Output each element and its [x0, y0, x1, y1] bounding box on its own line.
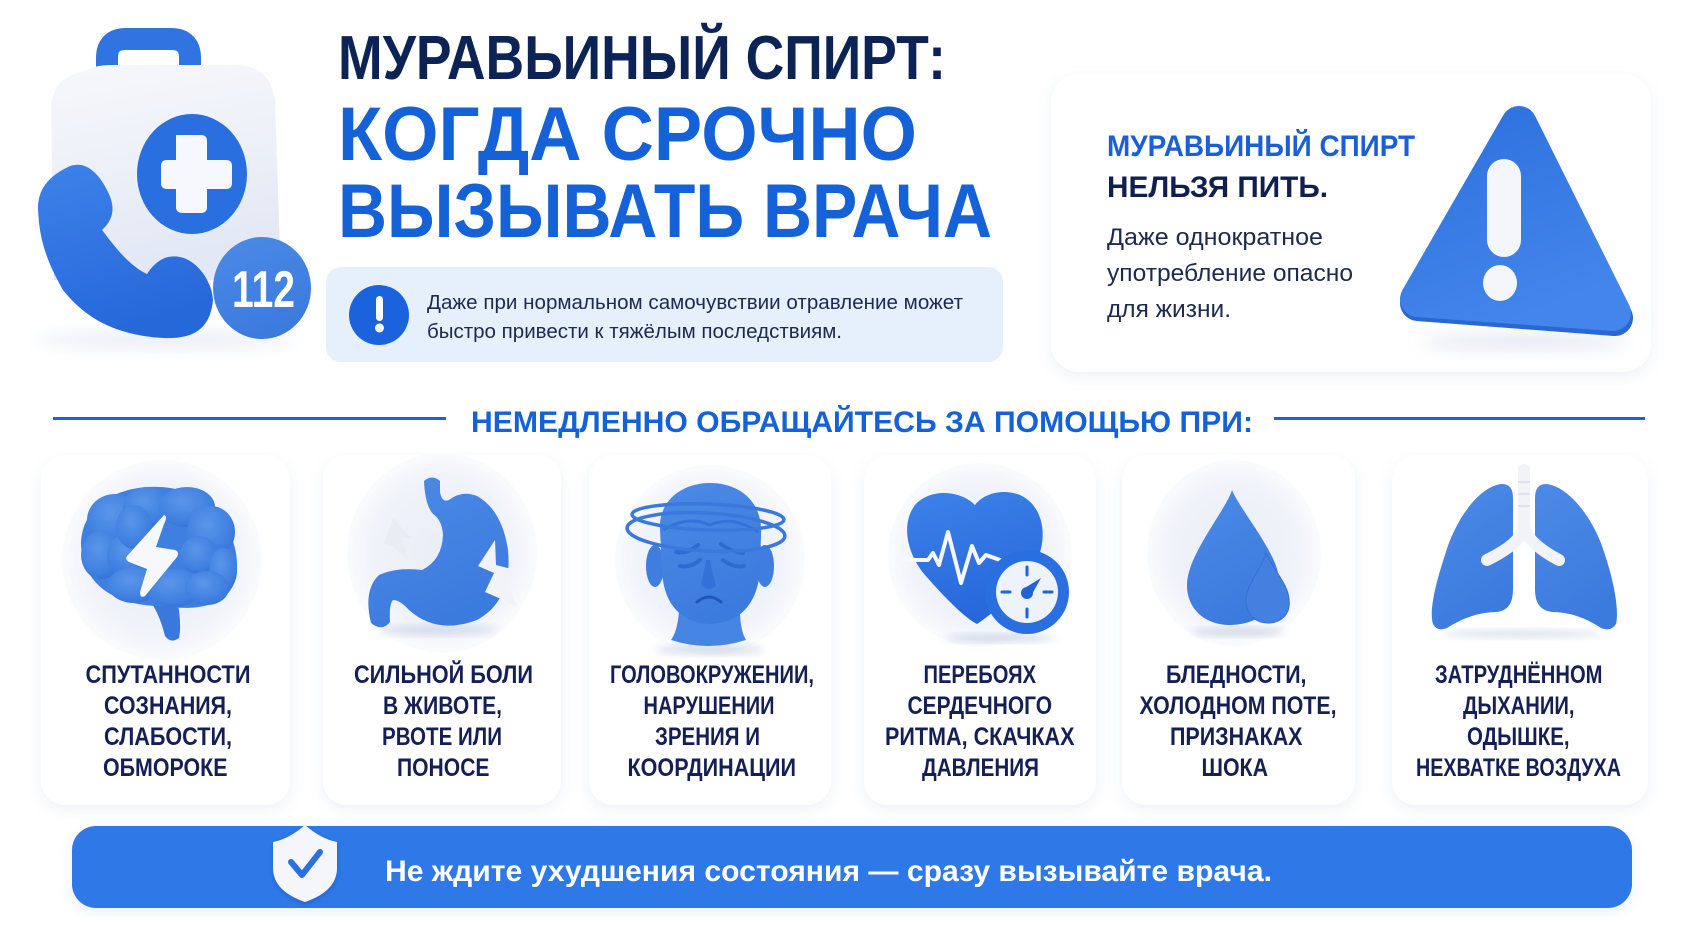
text: heart rhythm — [885, 661, 1075, 782]
text: difficulty breathing — [1416, 661, 1621, 782]
panel: abdominal pain — [323, 453, 561, 805]
panel: difficulty breathing — [1392, 455, 1648, 805]
text: pallor and cold sweat: ПРИЗНАКАХ — [1170, 723, 1303, 751]
text: dizziness: ЗРЕНИЯ И — [655, 723, 760, 751]
text: danger description — [1107, 224, 1353, 323]
icon: 112 badge: 112 — [232, 261, 295, 319]
panel: dizziness — [589, 455, 831, 805]
text: dizziness: НАРУШЕНИИ — [644, 692, 774, 720]
text: banner message: Не ждите ухудшения состояния — сразу вызывайте врача. — [385, 855, 1272, 888]
text: dizziness: КООРДИНАЦИИ — [628, 754, 796, 782]
section heading — [53, 405, 1645, 439]
text: abdominal pain: СИЛЬНОЙ БОЛИ — [354, 659, 533, 689]
text: warning note — [427, 291, 964, 343]
text: danger description: употребление опасно — [1107, 260, 1353, 287]
text: warning note: Даже при нормальном самочувствии отравление может — [427, 291, 964, 314]
text: difficulty breathing: ОДЫШКЕ, — [1467, 723, 1570, 751]
text: abdominal pain: ПОНОСЕ — [397, 754, 490, 782]
text: warning note: быстро привести к тяжёлым последствиям. — [427, 320, 842, 343]
illustration: first aid kit, phone and 112 badge — [35, 39, 311, 347]
icon: kit handle — [107, 39, 190, 72]
callout: warning note — [326, 267, 1003, 362]
icon: heart and pressure gauge — [888, 463, 1072, 647]
icon: 112 badge — [213, 237, 311, 339]
icon: dizzy head — [615, 465, 805, 655]
heading: do not drink: МУРАВЬИНЫЙ СПИРТ — [1107, 129, 1415, 163]
text: difficulty breathing: ДЫХАНИИ, — [1463, 692, 1574, 720]
text: pallor and cold sweat: ХОЛОДНОМ ПОТЕ, — [1140, 692, 1336, 720]
text: confusion: СПУТАННОСТИ — [86, 661, 250, 689]
icon: spinning rings — [626, 501, 786, 555]
panel: pallor and cold sweat — [1122, 455, 1355, 805]
icon: lungs — [1432, 470, 1617, 638]
icon: lightning bolt — [126, 515, 178, 597]
text: abdominal pain: В ЖИВОТЕ, — [383, 692, 502, 720]
panel: confusion — [41, 455, 290, 805]
icon: warning triangle — [1418, 124, 1630, 348]
title: ВЫЗЫВАТЬ ВРАЧА — [338, 169, 992, 254]
heading: do not drink: НЕЛЬЗЯ ПИТЬ. — [1107, 171, 1328, 204]
icon: gauge — [985, 550, 1069, 634]
text: difficulty breathing: НЕХВАТКЕ ВОЗДУХА — [1416, 754, 1621, 782]
text: dizziness — [610, 661, 814, 782]
text: pallor and cold sweat: ШОКА — [1202, 754, 1268, 782]
text: abdominal pain: РВОТЕ ИЛИ — [382, 723, 502, 751]
panel: heart rhythm — [864, 455, 1096, 805]
text: danger description: Даже однократное — [1107, 224, 1323, 251]
text: danger description: для жизни. — [1107, 296, 1231, 323]
text: confusion — [86, 661, 250, 782]
banner: call a doctor — [72, 825, 1632, 908]
text: heart rhythm: СЕРДЕЧНОГО — [908, 692, 1052, 720]
icon: exclamation circle — [349, 285, 409, 345]
text: abdominal pain — [354, 659, 533, 782]
icon: trachea and bronchi — [1487, 470, 1559, 560]
text: confusion: СЛАБОСТИ, — [104, 723, 232, 751]
title: КОГДА СРОЧНО — [338, 92, 917, 177]
text: pallor and cold sweat — [1140, 661, 1336, 782]
text: confusion: СОЗНАНИЯ, — [104, 692, 232, 720]
icon: sweat drops — [1147, 460, 1321, 646]
heading: do not drink — [1107, 129, 1415, 204]
title — [338, 23, 992, 254]
text: heart rhythm: ПЕРЕБОЯХ — [924, 661, 1036, 689]
text: pallor and cold sweat: БЛЕДНОСТИ, — [1166, 661, 1306, 689]
icon: stomach — [347, 453, 537, 653]
text: heart rhythm: ДАВЛЕНИЯ — [922, 754, 1039, 782]
text: heart rhythm: РИТМА, СКАЧКАХ — [885, 723, 1075, 751]
icon: brain — [62, 460, 262, 660]
icon: kit body — [51, 65, 281, 280]
icon: pain bolts — [384, 518, 517, 606]
text: difficulty breathing: ЗАТРУДНЁННОМ — [1435, 661, 1602, 689]
icon: telephone handset — [38, 165, 213, 338]
text: confusion: ОБМОРОКЕ — [103, 754, 228, 782]
section heading: НЕМЕДЛЕННО ОБРАЩАЙТЕСЬ ЗА ПОМОЩЬЮ ПРИ: — [471, 405, 1253, 439]
panel: do not drink — [1051, 74, 1651, 372]
icon: ECG line — [903, 532, 1000, 583]
text: dizziness: ГОЛОВОКРУЖЕНИИ, — [610, 661, 814, 689]
icon: plus badge — [137, 114, 247, 234]
title: МУРАВЬИНЫЙ СПИРТ: — [338, 23, 946, 93]
icon: shield with check — [273, 825, 337, 902]
